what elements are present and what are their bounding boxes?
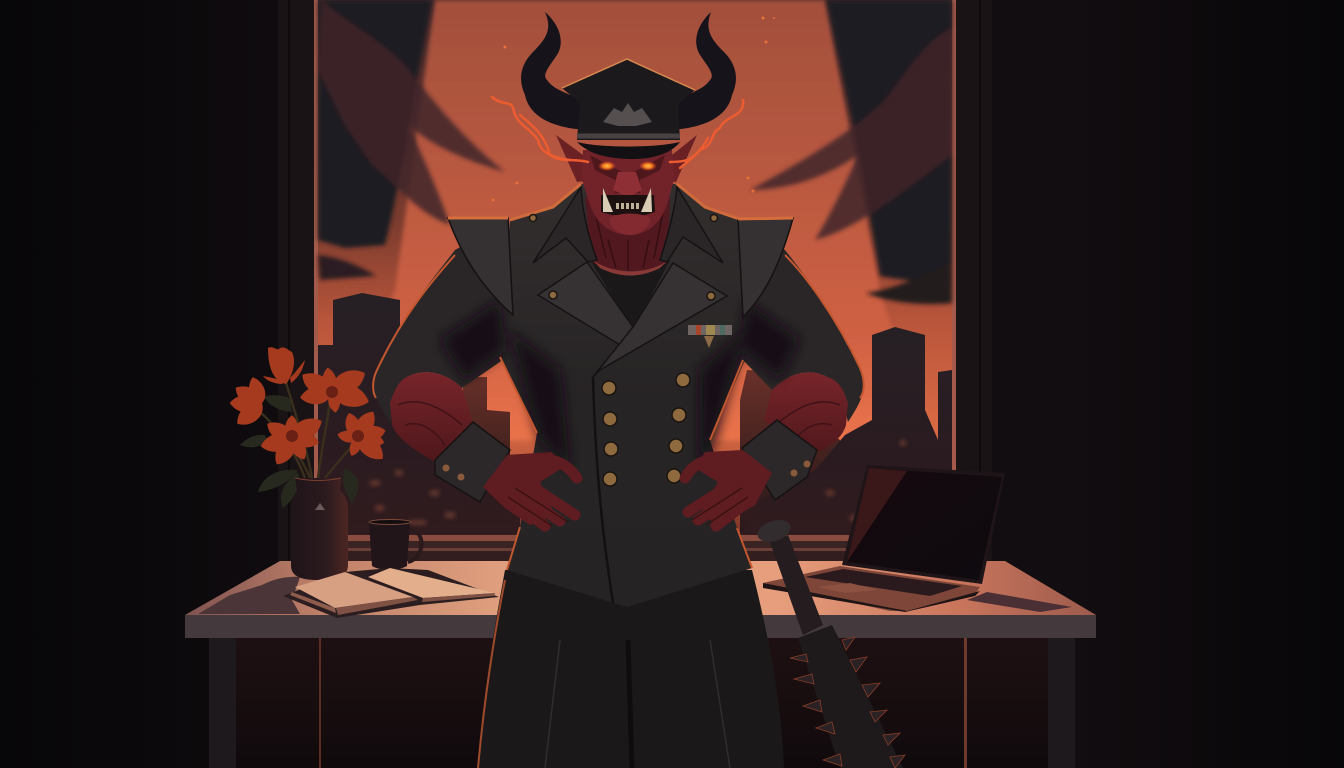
- right sleeve rim light: [785, 255, 864, 398]
- desk front edge: [185, 615, 1096, 638]
- desk: [185, 561, 1096, 768]
- right forearm: [764, 372, 848, 458]
- laptop screen: [842, 465, 1005, 584]
- left forearm: [390, 372, 473, 462]
- coat buttons: [530, 214, 718, 486]
- medal ribbon: [688, 325, 732, 348]
- city skyline right: [740, 327, 952, 535]
- under desk: [236, 637, 1048, 768]
- distant city: [440, 370, 840, 535]
- left sleeve: [374, 225, 520, 422]
- bud bloom top: [263, 347, 305, 384]
- vase shadow on desk: [198, 577, 300, 614]
- left lapel: [538, 262, 633, 345]
- coat rim light: [500, 357, 752, 570]
- window view: [318, 0, 952, 535]
- laptop base: [763, 566, 980, 611]
- bloom top right: [297, 363, 372, 414]
- desk top: [185, 561, 1096, 615]
- mouth and fangs: [601, 195, 655, 215]
- glowing eyes: [598, 161, 657, 171]
- left cuff: [435, 422, 510, 502]
- sparks: [492, 16, 775, 202]
- vase body: [291, 478, 348, 580]
- trousers: [478, 570, 784, 768]
- bloom lower right: [336, 407, 389, 465]
- head: [582, 150, 674, 235]
- right horn: [660, 12, 736, 130]
- club handle: [770, 535, 823, 635]
- club head: [798, 625, 903, 768]
- laptop shadow on desk: [967, 592, 1072, 612]
- coat shading: [440, 300, 800, 470]
- light beam: [345, 0, 925, 440]
- collar left: [533, 187, 597, 263]
- left shoulder pad: [448, 218, 513, 315]
- trouser rim light: [478, 580, 505, 768]
- dark cloud left: [318, 0, 505, 280]
- flames: [492, 97, 743, 168]
- stems: [258, 375, 358, 478]
- shoulder yoke glow: [510, 184, 742, 220]
- neck front: [585, 197, 670, 271]
- collar right: [660, 187, 723, 263]
- cap badge: [603, 103, 652, 126]
- city skyline left: [318, 293, 520, 535]
- bloom left: [230, 375, 269, 431]
- desk legs: [209, 638, 236, 768]
- inner shirt: [590, 260, 670, 330]
- right hand: [685, 450, 772, 526]
- window sill: [347, 535, 923, 561]
- laptop: [763, 465, 1005, 612]
- officer cap: [562, 59, 695, 140]
- left horn: [521, 12, 597, 130]
- left hand: [483, 452, 577, 526]
- left sleeve rim light: [373, 255, 455, 398]
- blossoms: [230, 347, 389, 469]
- bloom lower left: [259, 412, 326, 469]
- dark cloud right: [750, 0, 952, 304]
- figure: [373, 12, 864, 768]
- spiked club: [755, 516, 905, 768]
- snout and brow: [590, 155, 665, 193]
- ears: [556, 135, 697, 182]
- forearm muscle lines: [398, 402, 840, 445]
- right shoulder pad: [738, 218, 793, 317]
- window frame pillars: [278, 0, 992, 561]
- cuff buttons: [442, 460, 810, 480]
- open book: [283, 568, 499, 618]
- chin and lips: [610, 214, 650, 235]
- city lights: [370, 440, 928, 525]
- right sleeve: [730, 225, 864, 422]
- screen reflection: [847, 468, 907, 562]
- club spikes: [790, 637, 905, 768]
- right lapel: [593, 263, 727, 377]
- coat body: [500, 184, 752, 607]
- club knob: [755, 516, 793, 546]
- flower vase: [230, 347, 389, 580]
- coat front edge: [593, 377, 613, 603]
- right cuff: [742, 420, 817, 500]
- coffee mug: [369, 520, 422, 570]
- leaves: [240, 395, 358, 508]
